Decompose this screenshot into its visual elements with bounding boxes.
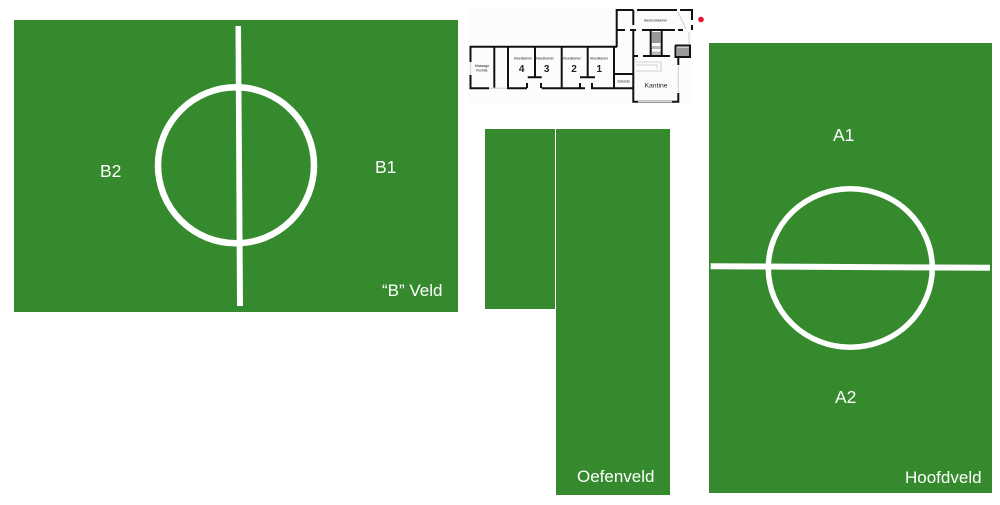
- label: B Veld: “B” Veld: [382, 281, 442, 300]
- room labels: 2: [571, 64, 577, 75]
- room labels: 4: [519, 64, 525, 75]
- stair and storage fills: [652, 32, 689, 56]
- label: B2: B2: [100, 161, 121, 181]
- room labels: Kleedkamer: [514, 56, 533, 60]
- floor plan: [467, 8, 693, 104]
- label: A2: A2: [835, 387, 856, 407]
- pale interior lines: [470, 12, 689, 102]
- room labels: Ruimte: [476, 68, 488, 72]
- room labels: 1: [597, 64, 603, 75]
- panel: main field: [709, 43, 992, 493]
- room labels: Massage: [475, 64, 489, 68]
- room labels: Kleedkamer: [536, 56, 555, 60]
- panel: B field: [14, 20, 458, 312]
- room labels: Kleedkamer: [563, 56, 582, 60]
- main field centre circle: [768, 189, 932, 347]
- label: A1: A1: [833, 125, 854, 145]
- room labels: Scheids: [617, 79, 630, 83]
- B field centre line: [236, 26, 243, 306]
- B field centre circle: [158, 87, 314, 243]
- room labels: Bestuurskamer: [644, 18, 668, 22]
- label: Hoofdveld: Hoofdveld: [905, 468, 982, 487]
- room labels: Kantine: [644, 82, 668, 90]
- room labels: [475, 18, 668, 89]
- main field centre line: [711, 263, 990, 271]
- room labels: Kleedkamer: [590, 56, 609, 60]
- label: B1: B1: [375, 157, 396, 177]
- room labels: 3: [544, 64, 550, 75]
- red location dot: [698, 17, 704, 22]
- label: Oefenveld: Oefenveld: [577, 467, 654, 486]
- panel: practice field: [485, 129, 670, 495]
